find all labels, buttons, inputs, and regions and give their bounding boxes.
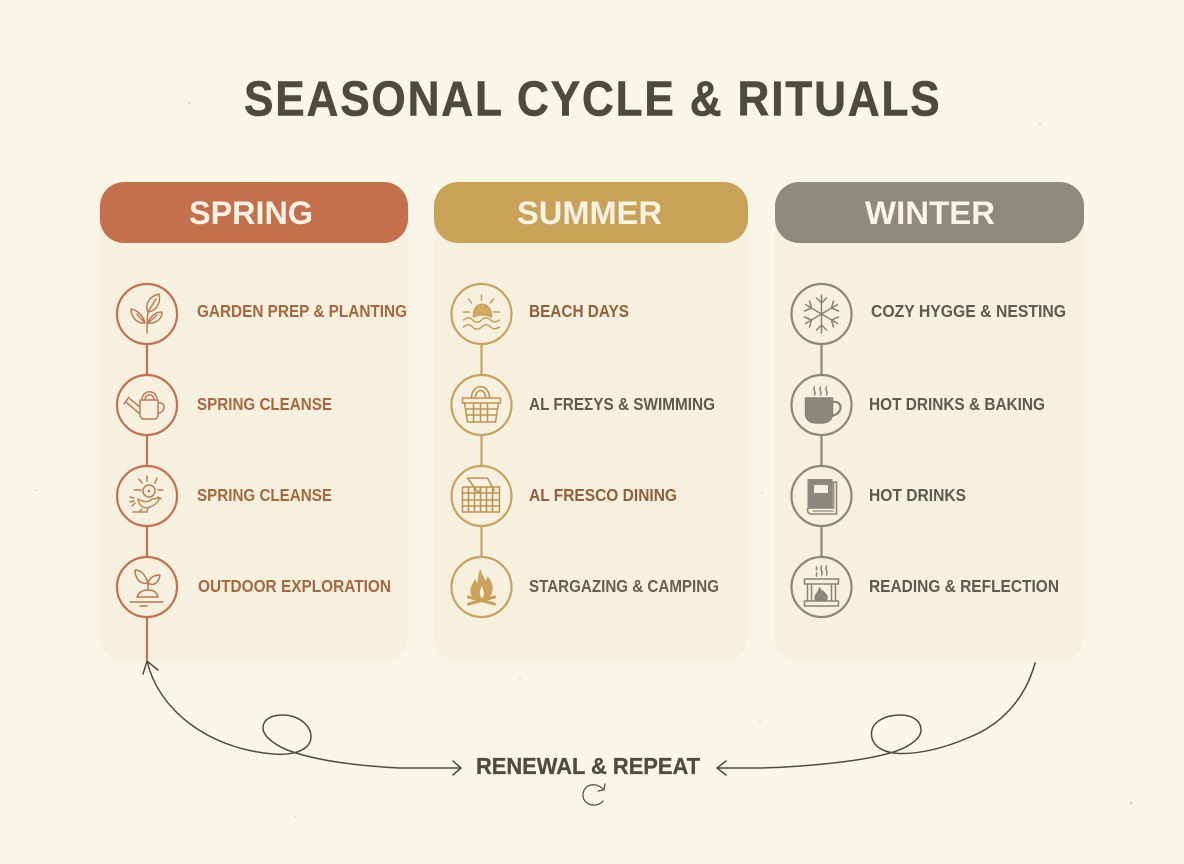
summer item: picnic hamper: AL FRESCO DINING xyxy=(529,485,677,505)
renewal label: RENEWAL & REPEAT xyxy=(476,753,700,779)
winter header xyxy=(775,182,1084,243)
panel: spring xyxy=(100,182,408,661)
spring item: watering can xyxy=(117,375,332,435)
arrow: spring return loop xyxy=(143,661,461,775)
spring header xyxy=(100,182,408,243)
title: SEASONAL CYCLE & RITUALS xyxy=(244,71,940,126)
summer header xyxy=(434,182,748,243)
winter item: book: HOT DRINKS xyxy=(869,485,966,505)
summer item: basket: AL FREΣYS & SWIMMING xyxy=(529,394,715,414)
spring item: sprout xyxy=(117,557,391,617)
spring item: sun and bird: SPRING CLEANSE xyxy=(197,485,332,505)
summer header: SUMMER xyxy=(517,195,662,231)
spring item: watering can: SPRING CLEANSE xyxy=(197,394,332,414)
panel: winter xyxy=(775,182,1084,661)
winter item: snowflake: COZY HYGGE & NESTING xyxy=(871,301,1066,321)
icon: repeat xyxy=(583,784,605,805)
winter item: snowflake xyxy=(792,284,1066,344)
summer item: picnic hamper xyxy=(452,466,677,526)
summer item: basket xyxy=(452,375,715,435)
arrow: winter return loop xyxy=(717,663,1035,775)
spring item: garden prep: GARDEN PREP & PLANTING xyxy=(197,301,407,321)
winter header: WINTER xyxy=(865,195,995,231)
winter item: book xyxy=(792,466,966,526)
winter item: hot drink mug: HOT DRINKS & BAKING xyxy=(869,394,1045,414)
winter item: fireplace: READING & REFLECTION xyxy=(869,576,1059,596)
summer connector line xyxy=(480,344,483,557)
spring header: SPRING xyxy=(189,195,313,231)
summer item: campfire xyxy=(452,557,719,617)
spring item: garden prep xyxy=(117,284,407,344)
winter item: hot drink mug xyxy=(792,375,1045,435)
summer item: campfire: STARGAZING & CAMPING xyxy=(529,576,719,596)
summer item: beach days: BEACH DAYS xyxy=(529,301,629,321)
summer item: beach days xyxy=(452,284,629,344)
spring item: sun and bird xyxy=(117,466,332,526)
panel: summer xyxy=(434,182,748,661)
spring connector line xyxy=(146,344,148,660)
winter connector line xyxy=(820,344,823,557)
winter item: fireplace xyxy=(792,557,1059,617)
spring item: sprout: OUTDOOR EXPLORATION xyxy=(198,576,391,596)
